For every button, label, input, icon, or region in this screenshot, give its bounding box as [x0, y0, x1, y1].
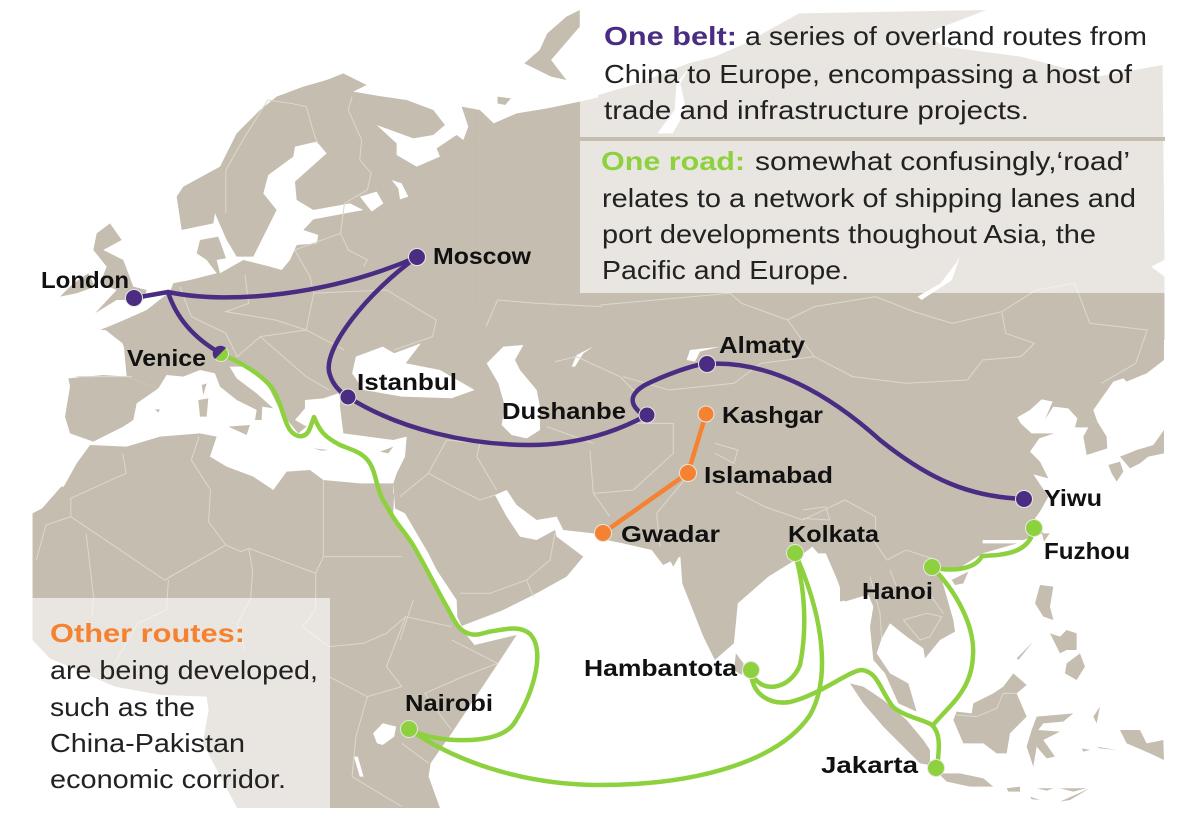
one road heading and text: One road:: [601, 146, 745, 176]
one road heading and text: somewhat confusingly,‘road’: [755, 146, 1130, 176]
other routes heading and text: such as the: [50, 692, 195, 722]
city labels: Nairobi: [405, 690, 493, 716]
other routes heading and text: economic corridor.: [50, 764, 286, 794]
one road heading and text: relates to a network of shipping lanes and: [602, 183, 1136, 213]
city labels: London: [41, 267, 129, 293]
one belt heading and text: [604, 21, 1147, 125]
other routes heading and text: Other routes:: [50, 618, 245, 648]
city labels: Jakarta: [821, 752, 918, 778]
city labels: Almaty: [719, 332, 805, 358]
city labels: Kashgar: [722, 402, 823, 428]
panel: one road: [580, 141, 1165, 293]
city labels: Venice: [127, 345, 206, 371]
city labels: Hambantota: [584, 655, 737, 681]
other routes heading and text: [50, 618, 318, 794]
city labels: Moscow: [433, 243, 531, 269]
one belt heading and text: trade and infrastructure projects.: [604, 95, 1029, 125]
city labels: [41, 243, 1130, 778]
one belt heading and text: China to Europe, encompassing a host of: [604, 59, 1133, 89]
one belt heading and text: One belt:: [604, 21, 737, 51]
one belt heading and text: a series of overland routes from: [745, 21, 1147, 51]
one road heading and text: [601, 146, 1136, 285]
city labels: Dushanbe: [502, 398, 626, 424]
city labels: Kolkata: [788, 521, 879, 547]
city labels: Istanbul: [357, 369, 457, 395]
other routes heading and text: are being developed,: [50, 655, 318, 685]
city markers: [126, 248, 1042, 776]
city labels: Islamabad: [704, 462, 833, 488]
one road heading and text: Pacific and Europe.: [602, 255, 849, 285]
panel: one belt: [580, 10, 1165, 141]
one road heading and text: port developments thoughout Asia, the: [602, 219, 1096, 249]
other routes heading and text: China-Pakistan: [50, 728, 245, 758]
city labels: Fuzhou: [1044, 538, 1130, 564]
panel: other routes: [32, 598, 330, 808]
city labels: Yiwu: [1044, 485, 1102, 511]
other routes (orange): [603, 414, 706, 533]
one road routes (green): [222, 354, 1034, 785]
city labels: Gwadar: [621, 521, 720, 547]
city labels: Hanoi: [862, 578, 933, 604]
one belt routes (purple): [134, 257, 1024, 499]
